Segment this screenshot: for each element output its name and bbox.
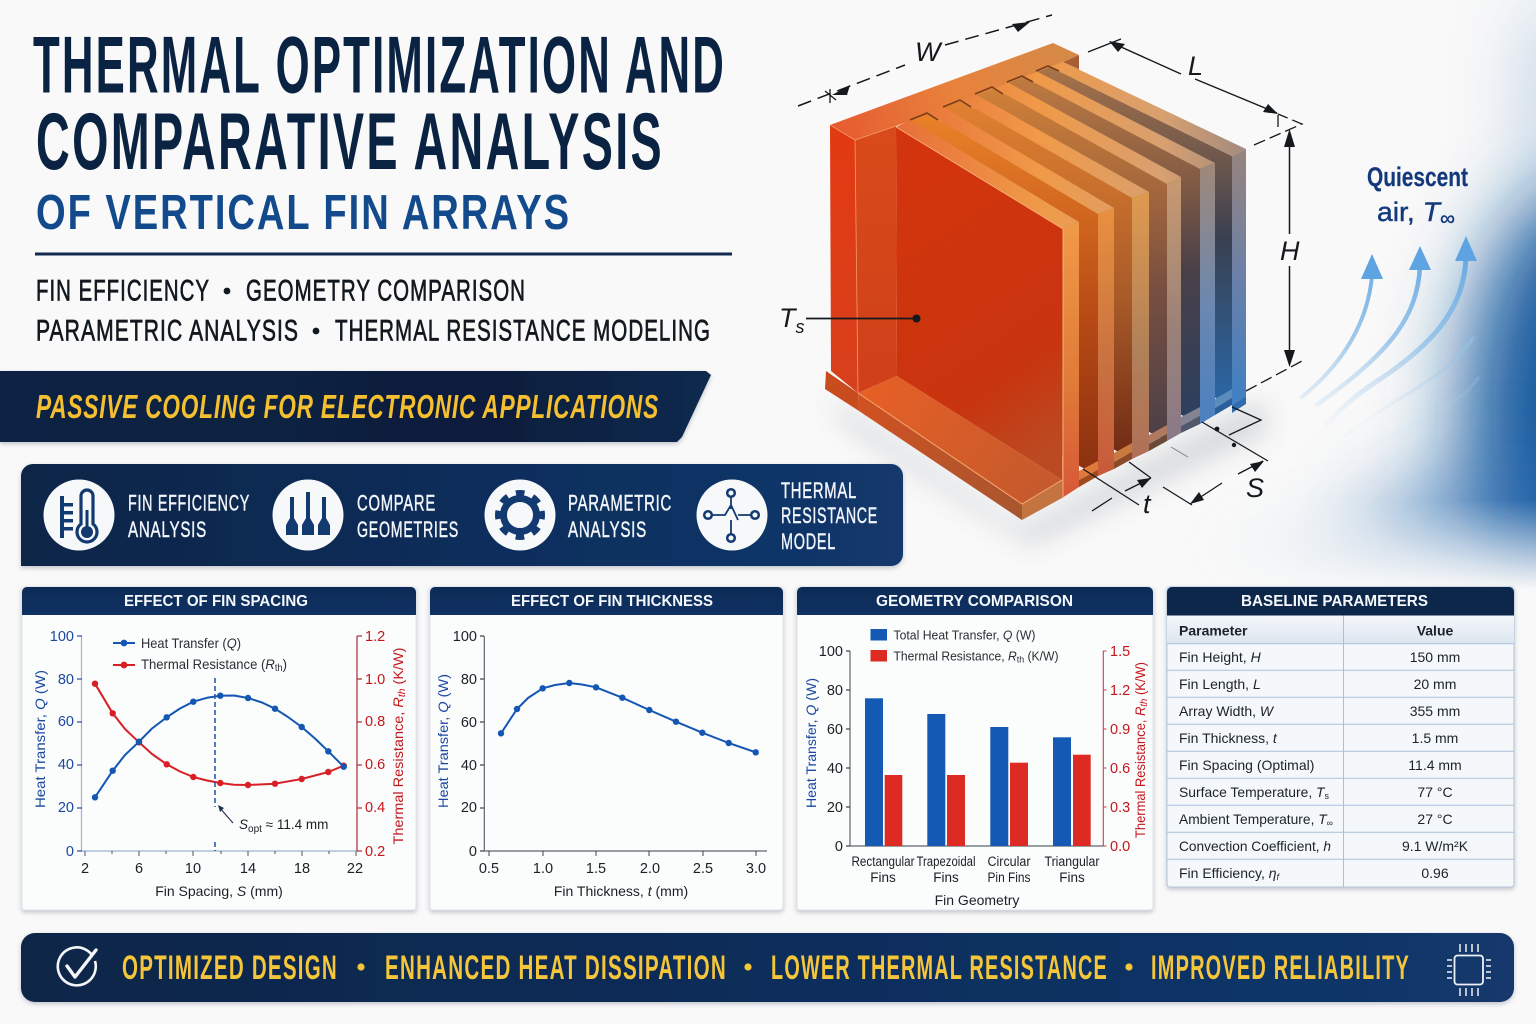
callout: surface temperature: s: [796, 317, 804, 337]
table rows: ∞: [1327, 818, 1333, 828]
label: parametric analysis: ANALYSIS: [568, 517, 647, 542]
label: compare geometries: GEOMETRIES: [357, 517, 459, 542]
callout: surface temperature: T: [779, 303, 796, 333]
icon: fin geometries: [272, 480, 344, 550]
panel: geometry comparison: [797, 587, 1153, 910]
right axis numbers: 0.4: [365, 800, 385, 816]
x axis numbers: 22: [347, 861, 363, 877]
icon: thermometer: [44, 480, 114, 550]
panel heading: [22, 587, 416, 615]
label: thermal resistance model: RESISTANCE: [781, 503, 878, 528]
table rows: Ambient Temperature, T: [1179, 811, 1327, 827]
right axis numbers: 0.3: [1110, 800, 1130, 816]
panel heading: GEOMETRY COMPARISON: [876, 593, 1073, 610]
table rows: 0.96: [1421, 865, 1449, 881]
y axis numbers: 60: [461, 715, 477, 731]
label: fin efficiency analysis: [128, 490, 250, 542]
dimension H: [1246, 129, 1302, 391]
category labels: [852, 854, 1100, 885]
main title: [33, 20, 726, 240]
front fin: [896, 120, 1079, 498]
icon: thermal network: [696, 480, 768, 550]
main title: COMPARATIVE ANALYSIS: [36, 97, 664, 187]
dimension S: [1163, 407, 1268, 505]
right axis title: Thermal Resistance, R: [390, 698, 406, 844]
table rows: Fin Efficiency, η: [1179, 865, 1277, 881]
annotation: optimal spacing: opt: [248, 824, 262, 835]
x axis title: Fin Spacing, S (mm): [155, 883, 283, 899]
footer benefits: ENHANCED HEAT DISSIPATION: [385, 949, 727, 987]
subtitle topics: GEOMETRY COMPARISON: [246, 274, 526, 308]
series: heat transfer: [498, 680, 759, 756]
table heading: BASELINE PARAMETERS: [1241, 593, 1428, 610]
left axis numbers: 60: [827, 722, 843, 738]
legend: Total Heat Transfer, Q (W): [894, 628, 1036, 642]
right axis title: th: [1139, 698, 1150, 707]
table rows: 27 °C: [1417, 811, 1453, 827]
dimension L: L: [1188, 51, 1203, 81]
airflow arrows: [1302, 236, 1478, 445]
y axis numbers: 100: [453, 629, 477, 645]
panel heading: [430, 587, 783, 615]
label: fin efficiency analysis: FIN EFFICIENCY: [128, 490, 250, 516]
subtitle topics: THERMAL RESISTANCE MODELING: [335, 314, 711, 348]
heat sink shadow: [826, 395, 1270, 545]
x axis numbers: 1.0: [533, 861, 553, 877]
left wall: [830, 125, 858, 393]
table rows: s: [1325, 791, 1329, 801]
table rows: 77 °C: [1417, 784, 1453, 800]
right axis numbers: 1.2: [365, 629, 385, 645]
label: compare geometries: COMPARE: [357, 490, 436, 516]
callout: surface temperature: [779, 303, 920, 337]
blue cooling glow: [1285, 0, 1536, 586]
bars: circular pin fins: [990, 727, 1028, 846]
fin 6: [1036, 62, 1246, 413]
banner: passive cooling: [0, 371, 711, 442]
right axis numbers: 0.9: [1110, 722, 1130, 738]
legend: th: [1017, 654, 1024, 666]
table heading: [1167, 587, 1514, 616]
table column header: Value: [1417, 622, 1453, 638]
table rows: Fin Thickness, t: [1179, 730, 1278, 746]
x axis numbers: 6: [135, 861, 143, 877]
table rows: 11.4 mm: [1408, 757, 1462, 773]
table rows: Convection Coefficient, h: [1179, 838, 1331, 854]
left axis numbers: 20: [827, 800, 843, 816]
right axis title: Thermal Resistance, R: [1133, 706, 1148, 838]
series: thermal resistance: [92, 680, 347, 788]
footer banner: [21, 933, 1514, 1002]
right axis numbers: 1.2: [1110, 683, 1130, 699]
x axis title: Fin Thickness, t (mm): [554, 883, 688, 899]
top plate: [830, 43, 1079, 140]
title rule: [35, 252, 732, 256]
annotation: optimal spacing: ≈ 11.4 mm: [262, 817, 328, 832]
y axis numbers: 0: [469, 844, 477, 860]
icon: gear: [484, 480, 556, 550]
x axis numbers: 18: [294, 861, 310, 877]
footer benefits: OPTIMIZED DESIGN: [122, 949, 338, 987]
legend: Thermal Resistance, R: [894, 648, 1017, 664]
right axis title: (K/W): [1133, 662, 1148, 699]
footer benefits: [122, 949, 1410, 987]
base plate: [825, 371, 1062, 520]
table rows: 9.1 W/m²K: [1402, 838, 1469, 854]
quiescent air label: Quiescent: [1367, 162, 1468, 192]
annotation: optimal spacing: S: [239, 817, 248, 832]
subtitle topics: [36, 274, 711, 348]
left axis numbers: 80: [58, 672, 74, 688]
x axis numbers: 2.5: [693, 861, 713, 877]
bars: trapezoidal fins: [927, 714, 965, 846]
x axis numbers: 2.0: [640, 861, 660, 877]
panel heading: [797, 587, 1153, 615]
y axis numbers: 80: [461, 672, 477, 688]
left axis title: Heat Transfer, Q (W): [803, 678, 819, 808]
heat sink illustration: [825, 43, 1246, 520]
category labels: Trapezoidal: [916, 854, 976, 869]
legend: ): [283, 656, 287, 672]
bars: triangular fins: [1053, 737, 1091, 846]
table column header: Parameter: [1179, 622, 1248, 638]
right axis numbers: 0.6: [365, 757, 385, 773]
left axis numbers: [819, 644, 843, 855]
right axis numbers: 0.2: [365, 844, 385, 860]
back wall: [855, 126, 897, 393]
dimension L: [1088, 39, 1302, 145]
table rows: f: [1277, 872, 1281, 882]
icon: chip: [1447, 944, 1491, 996]
right axis numbers: 0.0: [1110, 839, 1130, 855]
right axis title: th: [397, 688, 408, 697]
line chart: thickness: [435, 629, 767, 899]
right axis numbers: [365, 629, 385, 860]
table rows: [1179, 649, 1469, 882]
label: thermal resistance model: [781, 478, 878, 554]
left axis numbers: 20: [58, 800, 74, 816]
left axis numbers: 80: [827, 683, 843, 699]
category labels: Rectangular: [852, 854, 915, 869]
y axis numbers: 20: [461, 800, 477, 816]
series: heat transfer: [92, 692, 347, 800]
panel: analysis topics: [21, 464, 903, 566]
left axis numbers: 100: [50, 629, 74, 645]
table rows: 20 mm: [1414, 676, 1456, 692]
quiescent air label: air, T: [1377, 197, 1439, 227]
panel: baseline parameters table: [1167, 587, 1514, 887]
left axis numbers: 0: [66, 844, 74, 860]
subtitle topics: PARAMETRIC ANALYSIS: [36, 314, 299, 348]
x axis numbers: [81, 861, 363, 877]
right axis numbers: 1.0: [365, 672, 385, 688]
dimension W: [798, 15, 1052, 106]
legend: th: [275, 663, 283, 674]
label: thermal resistance model: THERMAL: [781, 478, 857, 503]
dimension t: [1083, 462, 1152, 519]
x axis numbers: 10: [185, 861, 201, 877]
table rows: Fin Length, L: [1179, 676, 1261, 692]
right axis numbers: 0.6: [1110, 761, 1130, 777]
annotation: optimal spacing: [215, 678, 328, 851]
left axis numbers: 60: [58, 714, 74, 730]
y axis numbers: 40: [461, 758, 477, 774]
left axis numbers: 40: [827, 761, 843, 777]
fin 3: [943, 94, 1167, 459]
bars: rectangular fins: [865, 698, 902, 846]
icon: check mark: [58, 947, 96, 985]
label: fin efficiency analysis: ANALYSIS: [128, 517, 207, 542]
x axis title: Fin Geometry: [935, 892, 1019, 908]
label: parametric analysis: PARAMETRIC: [568, 490, 672, 516]
category labels: Triangular: [1044, 854, 1100, 869]
fin 5: [1007, 71, 1232, 424]
x axis numbers: 1.5: [586, 861, 606, 877]
y axis title: Heat Transfer, Q (W): [435, 674, 451, 808]
category labels: Fins: [933, 870, 959, 885]
legend: [113, 635, 287, 674]
table rows: Fin Height, H: [1179, 649, 1262, 665]
dimension S: S: [1246, 473, 1264, 503]
title third line: OF VERTICAL FIN ARRAYS: [36, 186, 571, 240]
left axis numbers: 100: [819, 644, 843, 660]
right axis numbers: 1.5: [1110, 644, 1130, 660]
fin 2: [910, 107, 1132, 476]
category labels: Fins: [870, 870, 896, 885]
table rows: Surface Temperature, T: [1179, 784, 1325, 800]
x axis numbers: [479, 861, 766, 877]
panel: effect of fin spacing: [22, 587, 416, 910]
dimension H: H: [1280, 236, 1300, 266]
y axis numbers: [453, 629, 477, 860]
main title: THERMAL OPTIMIZATION AND: [33, 20, 726, 110]
left axis numbers: 40: [58, 757, 74, 773]
footer benefits: LOWER THERMAL RESISTANCE: [771, 949, 1108, 987]
table column header: [1167, 616, 1514, 644]
x axis numbers: 14: [240, 861, 256, 877]
label: parametric analysis: [568, 490, 672, 542]
quiescent air label: [1367, 162, 1468, 230]
table rows: Array Width, W: [1179, 703, 1275, 719]
left axis numbers: 0: [835, 839, 843, 855]
panel heading: EFFECT OF FIN THICKNESS: [511, 593, 713, 610]
label: compare geometries: [357, 490, 459, 542]
right axis numbers: [1110, 644, 1130, 855]
right axis title: (K/W): [390, 648, 406, 689]
panel heading: EFFECT OF FIN SPACING: [124, 593, 308, 610]
legend: [870, 628, 1058, 666]
label: thermal resistance model: MODEL: [781, 529, 836, 554]
x axis numbers: 3.0: [746, 861, 766, 877]
table rows: Fin Spacing (Optimal): [1179, 757, 1314, 773]
bar chart: geometries: [803, 628, 1150, 908]
dimension t: t: [1143, 489, 1152, 519]
left axis numbers: [50, 629, 74, 860]
panel: effect of fin thickness: [430, 587, 783, 910]
legend: (K/W): [1024, 648, 1058, 664]
table rows: 150 mm: [1410, 649, 1460, 665]
legend: Thermal Resistance (R: [141, 656, 275, 672]
fin 4: [975, 82, 1200, 441]
left axis title: Heat Transfer, Q (W): [32, 670, 48, 808]
table rows: 355 mm: [1410, 703, 1460, 719]
subtitle topics: FIN EFFICIENCY: [36, 274, 210, 308]
category labels: Circular: [988, 854, 1031, 869]
category labels: Pin Fins: [988, 870, 1031, 885]
x axis numbers: 2: [81, 861, 89, 877]
table rows: 1.5 mm: [1412, 730, 1458, 746]
banner: passive cooling: PASSIVE COOLING FOR ELECTRONIC APPLICATIONS: [36, 389, 659, 426]
x axis numbers: 0.5: [479, 861, 499, 877]
dimension W: W: [915, 37, 943, 67]
category labels: Fins: [1059, 870, 1085, 885]
quiescent air label: ∞: [1440, 208, 1455, 230]
right axis numbers: 0.8: [365, 714, 385, 730]
line chart: spacing: [32, 629, 408, 899]
legend: Heat Transfer (Q): [141, 635, 241, 651]
